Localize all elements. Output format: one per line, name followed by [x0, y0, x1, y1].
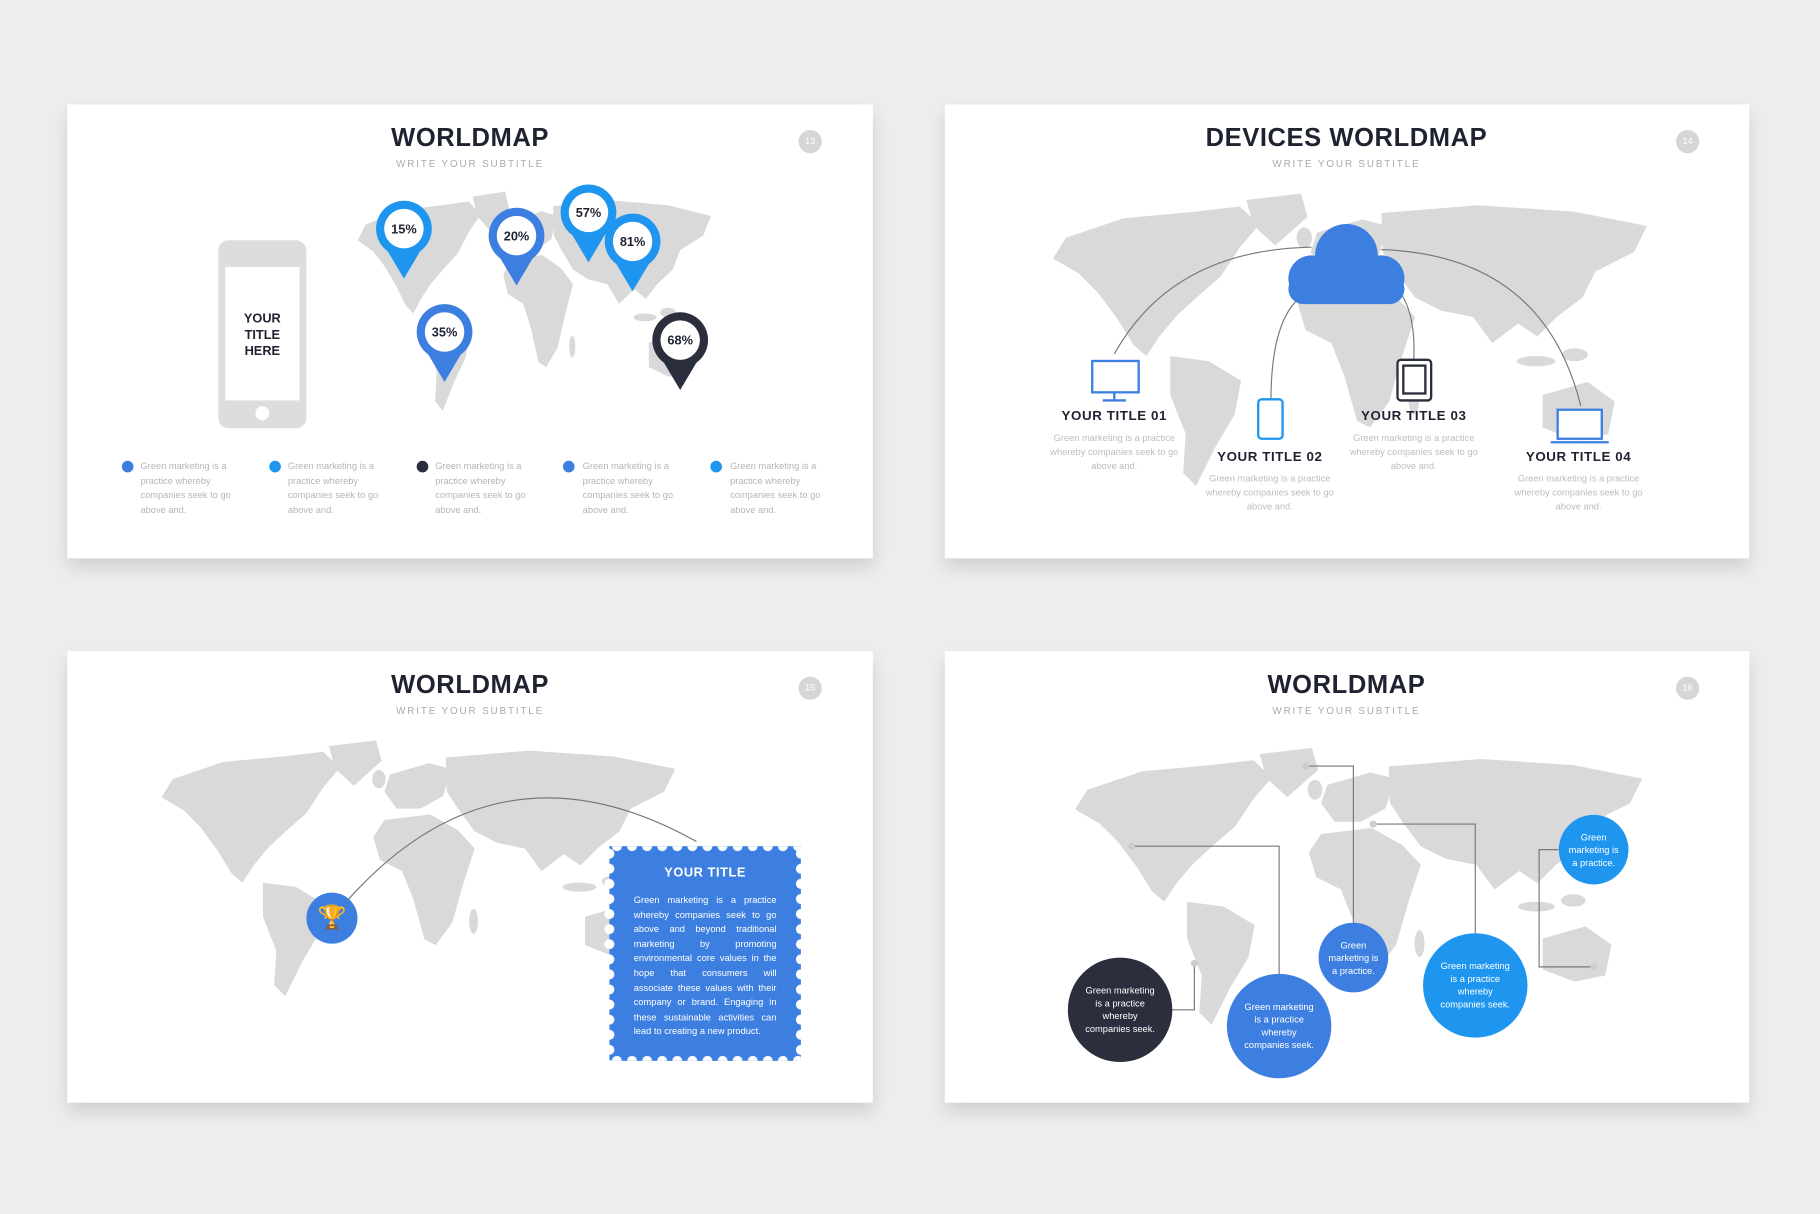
cloud [1288, 224, 1404, 304]
text: YOUR TITLE 02 [1217, 450, 1323, 464]
pins: 35% [432, 325, 457, 340]
text: companies seek. [1440, 999, 1510, 1010]
circles [350, 187, 1628, 1078]
icon: trophy badge: 🏆 [318, 905, 346, 931]
number 14: 14 [1683, 136, 1693, 146]
number 16 [1676, 677, 1699, 700]
text: YOUR TITLE 01 [1062, 410, 1167, 424]
stamp callout: YOUR TITLE [664, 866, 746, 880]
title 1: WORLDMAP [391, 123, 549, 152]
connectors panel 4 [1132, 766, 1594, 1010]
number 13: 13 [805, 136, 815, 146]
text: Green [1340, 940, 1366, 950]
stamp callout: Green marketing is a practice whereby companies seek to go above and beyond traditional marketing by promoting environmental core values in the hope that consumers will associate these values with their company or brand. Engaging in these sustainable activities can lead to creating a new product. [634, 895, 777, 1037]
text: whereby [1262, 1027, 1297, 1038]
subtitle 3: WRITE YOUR SUBTITLE [396, 705, 544, 716]
icon: trophy badge [306, 893, 357, 944]
text: is a practice [1254, 1014, 1304, 1025]
text: YOUR TITLE 04 [1526, 450, 1631, 464]
stamp callout [609, 846, 801, 1061]
bullets [122, 460, 820, 515]
panel: arc worldmap [67, 651, 873, 1103]
arcs panel 2 [1114, 247, 1581, 406]
text: Green marketing is a practice whereby companies seek to go above and. [140, 461, 231, 515]
text: Green marketing [1085, 985, 1155, 996]
panel: pins worldmap [67, 104, 873, 558]
text: Green marketing is a practice whereby companies seek to go above and. [1350, 433, 1478, 471]
text: companies seek. [1085, 1024, 1155, 1034]
text: Green marketing is a practice whereby companies seek to go above and. [730, 461, 820, 515]
number 15 [799, 677, 822, 700]
text: a practice. [1572, 857, 1615, 868]
icon: phone [218, 240, 306, 428]
arc panel 3 [348, 798, 696, 900]
pins [376, 184, 708, 390]
text: is a practice [1095, 998, 1145, 1009]
subtitle 1: WRITE YOUR SUBTITLE [396, 158, 544, 169]
title 3: WORLDMAP [391, 670, 549, 699]
text: Green marketing is a practice whereby companies seek to go above and. [288, 461, 378, 515]
pins: 81% [620, 234, 645, 249]
device icons [1091, 358, 1609, 444]
text: Green marketing is a practice whereby companies seek to go above and. [435, 461, 526, 515]
text: Green marketing [1245, 1002, 1314, 1012]
text: is a practice [1450, 974, 1500, 984]
text: whereby [1458, 987, 1493, 997]
pins: 20% [504, 228, 529, 243]
icon: phone: YOUR [244, 312, 281, 326]
text: marketing is [1569, 844, 1619, 855]
title 4: WORLDMAP [1268, 670, 1425, 699]
panel: devices worldmap [945, 104, 1749, 558]
text: Green marketing is a practice whereby companies seek to go above and. [583, 461, 673, 515]
title 2: DEVICES WORLDMAP [1206, 123, 1487, 152]
pins: 57% [576, 205, 601, 220]
pins: 15% [391, 221, 417, 236]
number 13 [799, 130, 822, 153]
text: Green marketing is a practice whereby companies seek to go above and. [1050, 433, 1178, 471]
text: Green marketing is a practice whereby companies seek to go above and. [1515, 474, 1643, 512]
text: Green marketing [1441, 961, 1510, 972]
text: companies seek. [1244, 1040, 1314, 1050]
number 14 [1676, 130, 1699, 153]
icon: phone: HERE [245, 345, 280, 359]
icon: phone: TITLE [245, 328, 280, 342]
text: YOUR TITLE 03 [1361, 410, 1466, 424]
number 16: 16 [1683, 682, 1693, 693]
panel: circles worldmap [945, 651, 1749, 1103]
text: whereby [1103, 1011, 1138, 1021]
device titles and texts [1050, 410, 1643, 512]
text: marketing is [1328, 952, 1378, 963]
text: Green marketing is a practice whereby companies seek to go above and. [1206, 474, 1334, 512]
subtitle 2: WRITE YOUR SUBTITLE [1272, 158, 1420, 169]
text: Green [1581, 832, 1607, 842]
pins: 68% [667, 333, 693, 348]
number 15: 15 [805, 682, 815, 693]
subtitle 4: WRITE YOUR SUBTITLE [1272, 705, 1420, 716]
text: a practice. [1332, 965, 1375, 976]
